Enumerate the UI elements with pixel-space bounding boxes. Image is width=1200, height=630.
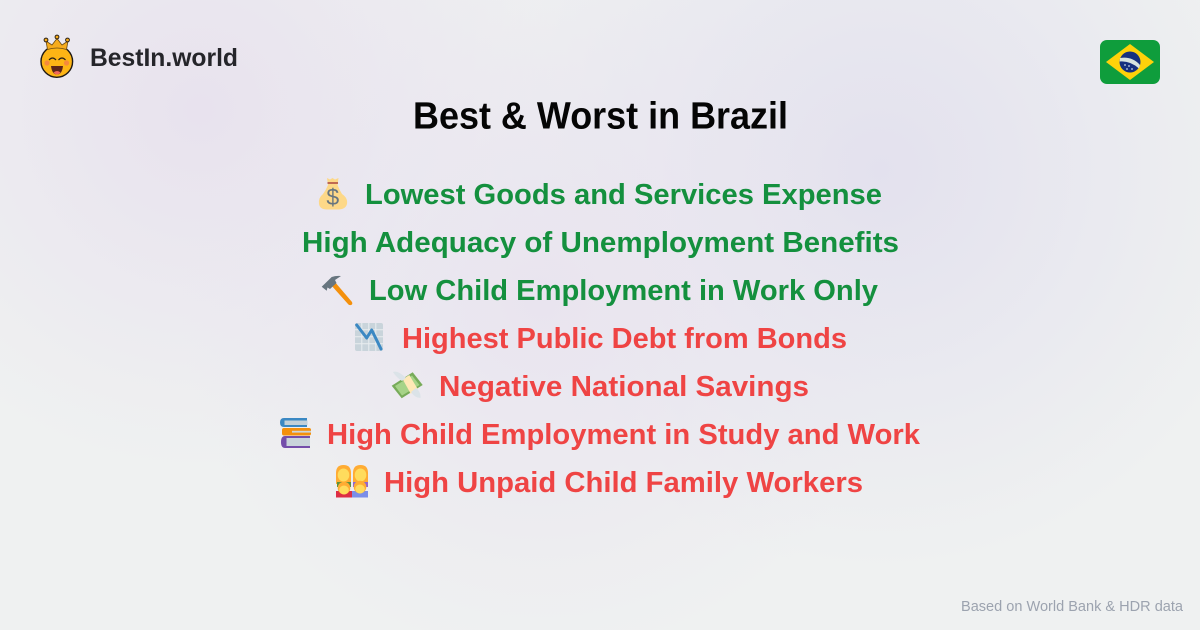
icon: hammer <box>322 276 352 305</box>
icon: Brazil flag <box>1100 40 1160 84</box>
icon: crowned smiley logo <box>41 35 73 77</box>
list: best and worst items <box>280 178 921 499</box>
item: highest public debt from bonds: Highest Public Debt from Bonds <box>402 323 847 355</box>
icon: chart decreasing <box>355 323 383 351</box>
title: Best & Worst in Brazil <box>413 96 788 138</box>
icon: money bag <box>319 178 347 210</box>
item: high unpaid child family workers: High Unpaid Child Family Workers <box>384 467 863 499</box>
item: negative national savings: Negative National Savings <box>439 371 809 403</box>
item: high child employment in study and work: High Child Employment in Study and Work <box>327 419 921 451</box>
icon: money bag: $ <box>326 184 339 210</box>
item: low child employment in work only: Low Child Employment in Work Only <box>369 275 878 307</box>
icon: money with wings <box>392 372 423 398</box>
logo wordmark: BestIn.world <box>90 44 238 72</box>
item: lowest goods and services expense: Lowest Goods and Services Expense <box>365 179 882 211</box>
icon: books <box>280 418 311 448</box>
item: high adequacy of unemployment benefits: High Adequacy of Unemployment Benefits <box>302 227 899 259</box>
icon: family <box>336 465 368 498</box>
footer source note: Based on World Bank & HDR data <box>961 599 1184 615</box>
